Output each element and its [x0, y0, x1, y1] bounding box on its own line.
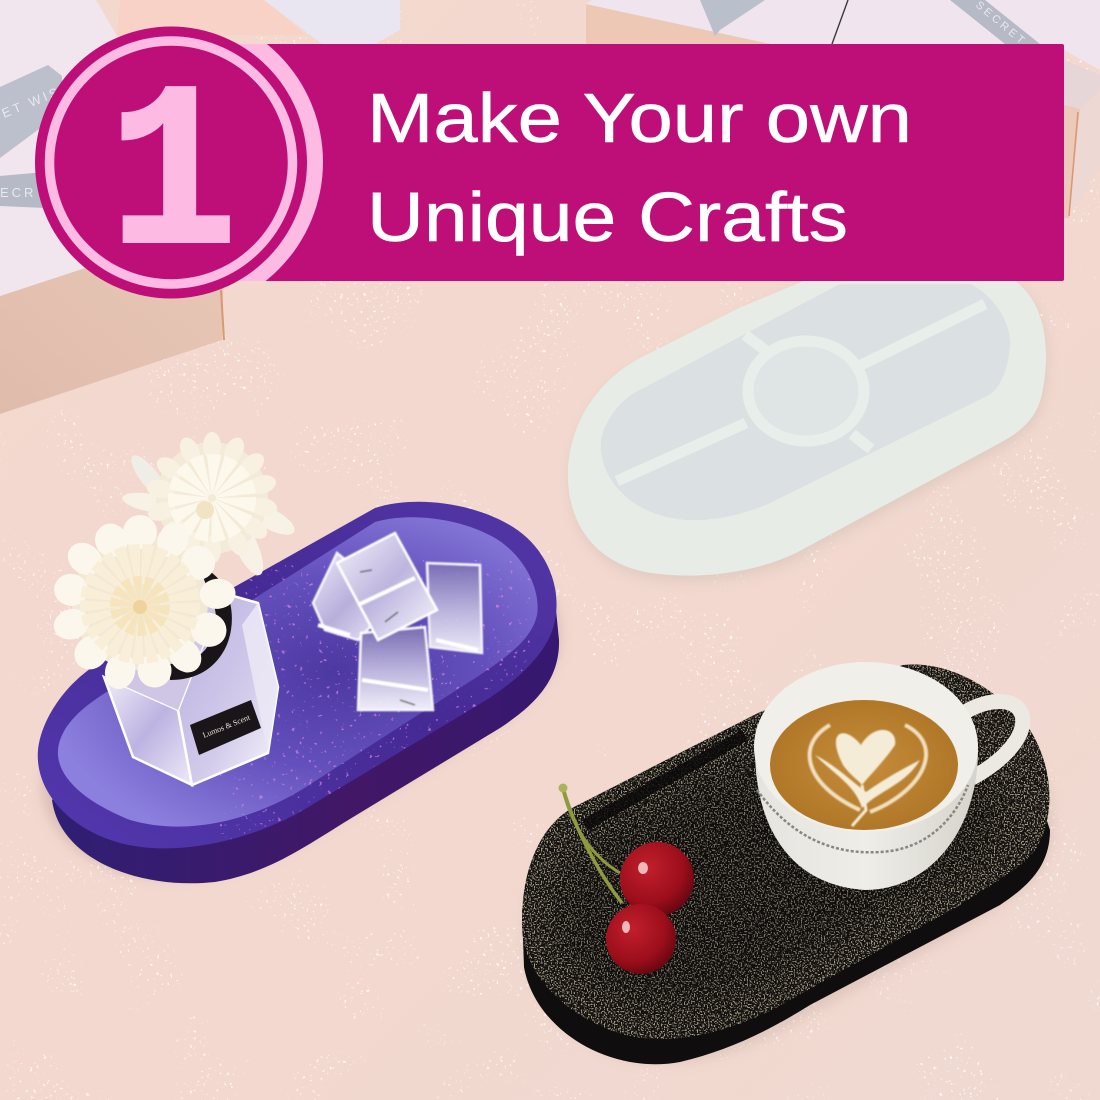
latte art [810, 725, 926, 826]
upper flower long petals [121, 450, 299, 580]
black glitter tray [515, 655, 1060, 1064]
ribbon: ECR [0, 185, 36, 200]
coffee surface [770, 700, 958, 830]
tray side [52, 600, 559, 883]
mold dividers [617, 304, 985, 481]
ribbon [0, 65, 75, 208]
cherries [558, 784, 694, 974]
purple resin tray [38, 502, 561, 883]
mold outer rim [568, 255, 1046, 576]
flower upper [121, 432, 299, 580]
gift box top left [0, 0, 225, 414]
black label [190, 700, 261, 755]
ribbon text: SECRET [973, 0, 1029, 49]
badge back crescent [238, 44, 323, 281]
black bottle neck [170, 572, 224, 672]
gift box top right [586, 0, 1100, 218]
badge circle [35, 26, 307, 298]
badge number: 1 [109, 47, 237, 311]
flower lower [50, 515, 237, 693]
ribbon: ET WISH [0, 79, 75, 121]
tray floor [58, 517, 538, 827]
heading line two: Unique Crafts [367, 178, 848, 256]
peach envelope [117, 0, 305, 35]
silicone mold [568, 255, 1048, 582]
cup handle [965, 701, 1023, 778]
tray side [522, 800, 1050, 1064]
glass bottle [104, 572, 278, 785]
glitter speckle [515, 655, 1060, 1050]
pale card [264, 0, 400, 44]
badge ring [50, 41, 292, 284]
heading line one: Make Your own [367, 79, 912, 157]
mold cavity floor [601, 284, 1010, 520]
opal flakes [220, 560, 530, 840]
coffee cup [754, 662, 1023, 890]
black label: Lumos & Scent [201, 712, 252, 740]
cup body [755, 750, 978, 890]
title banner [35, 26, 1064, 298]
ice cubes [313, 533, 482, 710]
